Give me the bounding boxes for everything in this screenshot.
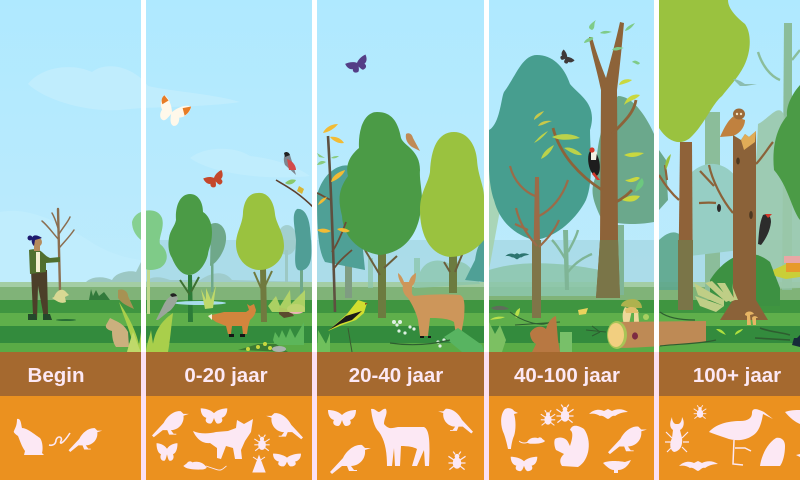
- species icons: 40-100 jaar: [501, 405, 647, 473]
- species icons: Begin: [14, 419, 102, 455]
- icon: bullfinch on branch: [276, 152, 314, 208]
- light green tree: [420, 132, 484, 293]
- icon: butterfly and blossoms: [773, 256, 800, 279]
- icon: moth: [253, 456, 265, 472]
- icon: mushrooms: [621, 299, 642, 324]
- heading: 0-20 jaar: 0-20 jaar: [184, 364, 268, 387]
- icon: stag beetle and branches: [660, 312, 800, 347]
- icon: owl: [760, 438, 785, 466]
- sapling with leaves: [317, 124, 352, 312]
- icon: bird: [608, 426, 647, 454]
- distant trees: [146, 225, 312, 282]
- icon: small mushrooms: [745, 311, 758, 325]
- heading: Begin: Begin: [28, 364, 84, 387]
- icon: squirrel: [530, 316, 560, 352]
- grass tuft: [317, 330, 330, 352]
- icon: bird flipped: [266, 413, 303, 439]
- icon: fallen log: [607, 321, 706, 349]
- background teal tree: [317, 165, 365, 298]
- pale tree crowns: [659, 110, 800, 306]
- icon: mouse: [519, 437, 545, 444]
- icon: small beetle: [694, 405, 706, 419]
- dividers: [141, 0, 659, 480]
- panel: Begin landscape: [28, 209, 141, 352]
- dark green tree: [340, 112, 422, 318]
- icon: bird: [152, 411, 189, 437]
- grass patch: [560, 332, 572, 352]
- icon: butterfly: [511, 457, 537, 471]
- icon: root ball: [52, 290, 69, 303]
- panel: age band backgrounds: [0, 352, 800, 480]
- icon: large brown tree with leaves: [534, 20, 644, 298]
- icon: mouse: [183, 461, 226, 470]
- tree: pale green: [132, 210, 167, 314]
- tree: mid green background: [210, 223, 226, 292]
- pale background trunks: [705, 23, 800, 292]
- icon: beetle: [541, 410, 555, 425]
- icon: dark green tree: [773, 85, 800, 220]
- ground layers: [0, 282, 800, 352]
- species icons: 20-40 jaar: [328, 409, 473, 474]
- panel: 40-100 jaar landscape: [489, 20, 706, 352]
- tree: teal young: [294, 209, 311, 294]
- icon: black woodpecker: [758, 214, 772, 245]
- mid green tree: [593, 96, 654, 224]
- icon: purple emperor butterfly: [345, 54, 371, 76]
- distant hills: [86, 262, 141, 282]
- panel: 0-20 jaar landscape: [132, 94, 314, 352]
- icon: owl: [720, 108, 745, 137]
- icon: squirrel: [554, 426, 589, 467]
- icon: bat: [679, 461, 718, 471]
- tall grass patches: [268, 290, 305, 312]
- fern: [444, 328, 484, 352]
- icon: dark butterfly: [557, 49, 575, 67]
- pale background trees: [368, 258, 480, 288]
- background trees: [489, 170, 624, 296]
- sky background: [0, 0, 800, 285]
- icon: small bird: [603, 460, 631, 473]
- icon: bat: [505, 253, 529, 259]
- icon: bird on grass: [156, 293, 178, 320]
- icon: butterfly: [201, 408, 227, 424]
- icon: young bare sapling: [42, 209, 74, 290]
- icon: green leaves on ground: [716, 329, 743, 335]
- icon: planter person: [28, 235, 76, 321]
- icon: fox: [193, 419, 253, 459]
- icon: stag beetle: [665, 417, 689, 452]
- heading: 20-40 jaar: 20-40 jaar: [349, 364, 443, 387]
- icon: fox: [208, 304, 256, 337]
- icon: great spotted woodpecker: [586, 147, 602, 180]
- icon: butterfly: [273, 454, 301, 466]
- panel: 100+ jaar landscape: [659, 0, 800, 347]
- plant clump: [201, 285, 216, 309]
- icon: golden oriole: [328, 300, 368, 352]
- icon: butterfly: [156, 443, 178, 461]
- clouds: [0, 66, 310, 284]
- icon: thrush in grass: [118, 289, 134, 309]
- icon: partial bird lower right: [796, 454, 800, 457]
- teal tree right: [465, 240, 484, 282]
- icon: yellow flowers and mouse: [238, 342, 288, 352]
- icon: bird flipped: [438, 409, 473, 433]
- branch on ground: [390, 340, 450, 345]
- icon: beetle: [254, 435, 270, 451]
- icon: fern: [694, 281, 738, 312]
- icon: deer: [371, 409, 429, 466]
- tree: light green young: [236, 193, 284, 322]
- icon: bird on tree top: [406, 133, 420, 151]
- distant bird: [733, 79, 757, 86]
- icon: worm: [49, 433, 70, 445]
- icon: perched bird upright: [501, 408, 518, 449]
- icon: dead broken trunk: [699, 131, 773, 320]
- icon: hare: [14, 419, 44, 455]
- heading: 100+ jaar: 100+ jaar: [693, 364, 781, 387]
- icon: orange tip white butterfly: [153, 94, 192, 129]
- icon: brown sapling: [510, 166, 568, 318]
- icon: bird on ground: [490, 306, 520, 320]
- heading: 40-100 jaar: 40-100 jaar: [514, 364, 620, 387]
- species icons: 100+ jaar: [665, 405, 800, 471]
- grass tuft: [119, 302, 141, 352]
- icon: peacock-style butterfly on flowers: [279, 304, 305, 318]
- branch on ground: [510, 312, 560, 325]
- icon: beetle: [556, 405, 574, 423]
- panel: 20-40 jaar landscape: [317, 54, 484, 352]
- grass tuft and fern: [489, 322, 506, 352]
- icon: tree with light green crown: [659, 0, 750, 310]
- icon: white flowers: [392, 320, 464, 349]
- teal big tree: [489, 55, 592, 240]
- icon: rabbit: [106, 318, 129, 347]
- icon: bat: [589, 409, 628, 419]
- icon: small bird: [69, 428, 102, 452]
- yellow leaf: [578, 308, 588, 315]
- grass tuft: [146, 313, 173, 352]
- icon: butterfly: [328, 410, 356, 426]
- icon: beetle: [448, 452, 466, 470]
- horizon haze: [146, 240, 800, 284]
- icon: roe deer: [398, 273, 465, 338]
- icon: small tortoiseshell butterfly: [203, 170, 227, 190]
- tree: dark green young: [168, 194, 212, 322]
- icon: bird: [330, 445, 371, 474]
- icon: stork: [709, 409, 773, 465]
- species icons: 0-20 jaar: [152, 408, 303, 472]
- icon: partial bird top right: [785, 410, 800, 424]
- icon: pond: [174, 301, 226, 305]
